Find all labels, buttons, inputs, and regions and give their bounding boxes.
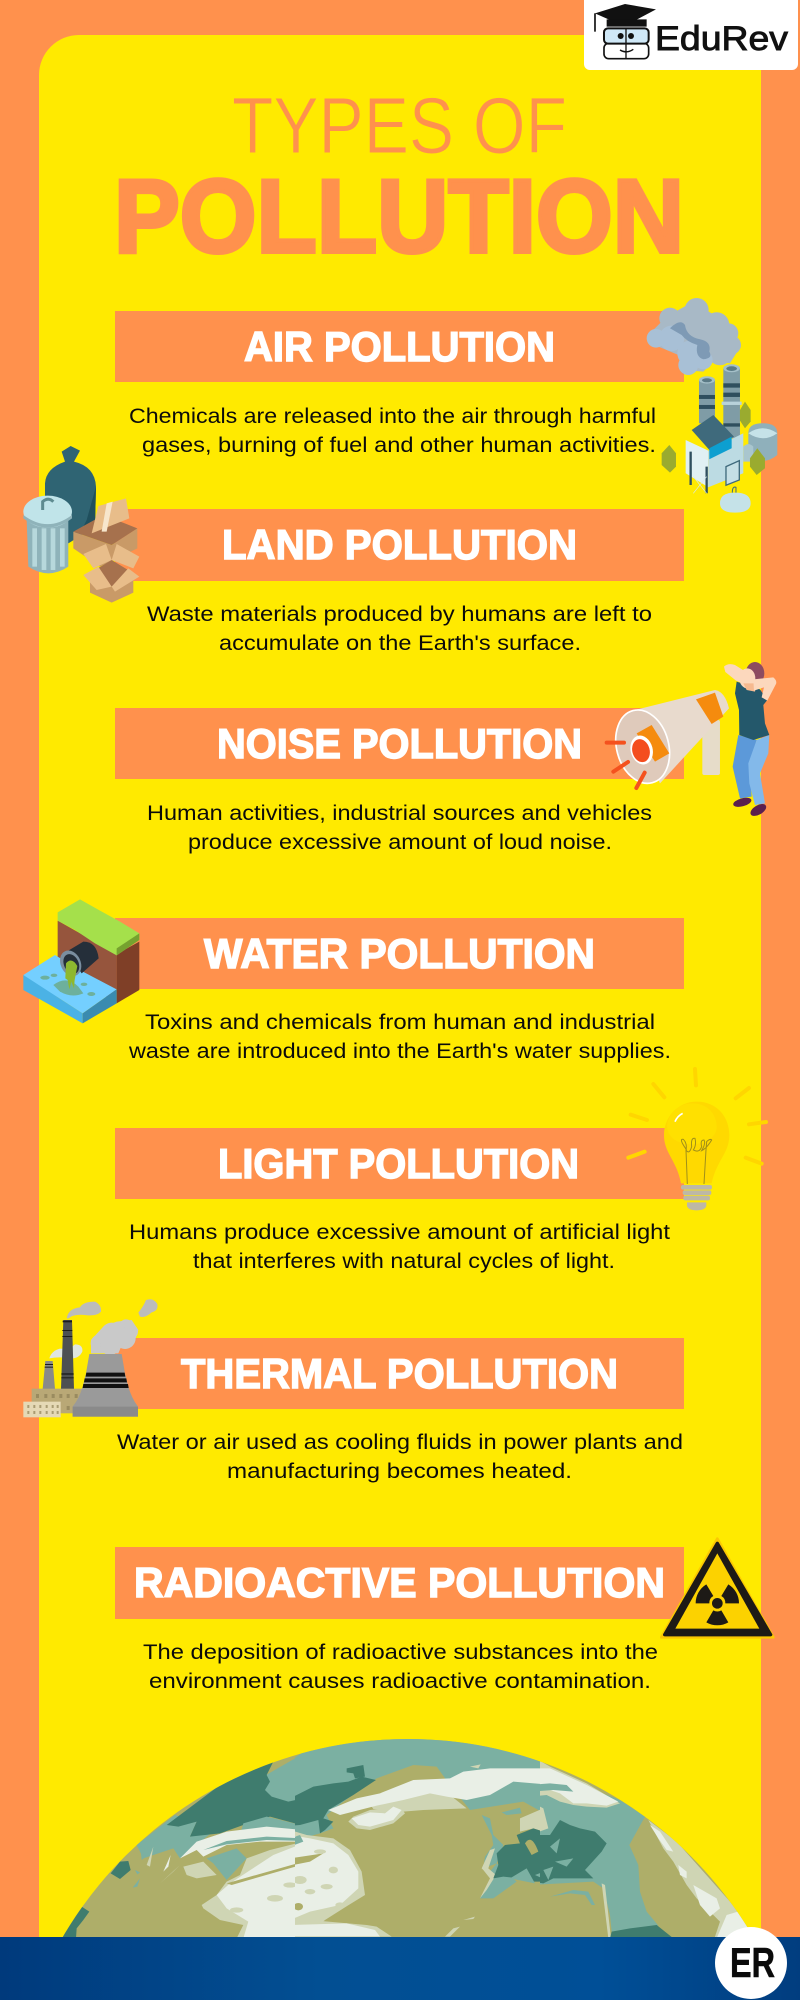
heading: land pollution: LAND POLLUTION [222,521,577,568]
text: radioactive description: The deposition of radioactive substances into the [143,1640,658,1664]
panel: radioactive pollution [115,1547,684,1693]
panel: thermal pollution [115,1338,684,1483]
icon: factory with smoke [647,298,777,513]
icon: power plant cooling tower [23,1299,158,1417]
panel: light pollution [115,1128,684,1273]
banner: water pollution [115,918,684,989]
badge: ER: ER [730,1939,775,1986]
heading: radioactive pollution: RADIOACTIVE POLLUTION [134,1559,665,1606]
banner: air pollution [115,311,684,382]
text: air description: Chemicals are released into the air through harmful [129,404,656,428]
text: light description [129,1220,670,1273]
text: noise description: produce excessive amount of loud noise. [188,830,612,854]
text: noise description: Human activities, industrial sources and vehicles [147,801,652,825]
text: air description: gases, burning of fuel and other human activities. [142,433,656,457]
text: radioactive description: environment causes radioactive contamination. [149,1669,651,1693]
banner: light pollution [115,1128,684,1199]
banner: thermal pollution [115,1338,684,1409]
title [114,81,684,275]
text: thermal description: manufacturing becomes heated. [227,1459,572,1483]
badge: ER [715,1927,787,1999]
panel: noise pollution [115,708,684,854]
text: light description: Humans produce excessive amount of artificial light [129,1220,670,1244]
logo: EduRev: EduRev [655,20,788,58]
text: thermal description [117,1430,683,1483]
logo: EduRev [584,0,798,70]
footer band: blue [0,1937,800,2000]
text: water description [128,1010,671,1063]
panel: air pollution [115,311,684,457]
icon: radiation warning sign [661,1539,773,1637]
heading: noise pollution: NOISE POLLUTION [217,720,582,767]
icon: sewage pipe and water [23,899,139,1023]
icon: megaphone [607,690,729,789]
icon: garbage bag, trash can and boxes [23,446,139,603]
text: air description [129,404,656,457]
heading: thermal pollution: THERMAL POLLUTION [181,1350,618,1397]
panel: land pollution [115,509,684,655]
text: water description: Toxins and chemicals from human and industrial [145,1010,655,1034]
heading: air pollution: AIR POLLUTION [244,323,555,370]
banner: radioactive pollution [115,1547,684,1619]
text: land description: Waste materials produced by humans are left to [147,602,652,626]
text: noise description [147,801,652,854]
icon: woman covering ears [724,662,776,818]
heading: water pollution: WATER POLLUTION [204,930,595,977]
title line: types of: TYPES OF [232,81,567,170]
heading: light pollution: LIGHT POLLUTION [218,1140,579,1187]
text: water description: waste are introduced into the Earth's water supplies. [128,1039,671,1063]
banner: land pollution [115,509,684,581]
illustration: earth globe [62,1739,748,1937]
text: light description: that interferes with natural cycles of light. [193,1249,615,1273]
title line: pollution: POLLUTION [114,159,684,275]
text: land description: accumulate on the Earth's surface. [219,631,581,655]
icon: light bulb [628,1069,766,1210]
banner: noise pollution [115,708,684,779]
text: radioactive description [143,1640,658,1693]
text: land description [147,602,652,655]
panel: water pollution [115,918,684,1063]
text: thermal description: Water or air used as cooling fluids in power plants and [117,1430,683,1454]
